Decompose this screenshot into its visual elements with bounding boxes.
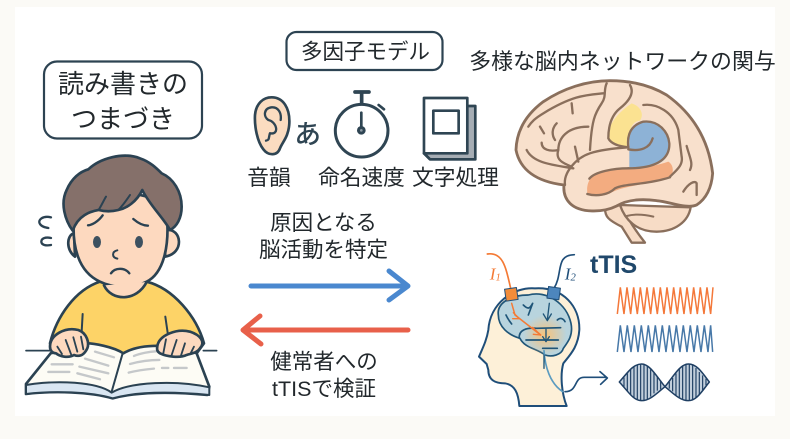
- label: identify causes: [259, 211, 388, 262]
- chart: orange carrier wave: [617, 287, 713, 314]
- label: verify with tTIS: 健常者への: [270, 350, 378, 374]
- current paths: [512, 303, 541, 335]
- label: verify with tTIS: tTISで検証: [272, 377, 376, 401]
- blue region: [629, 122, 669, 168]
- chart: blue carrier wave: [617, 325, 713, 352]
- brows: [88, 215, 148, 226]
- yellow region: [608, 103, 642, 147]
- cerebrum: [516, 81, 713, 211]
- right hand: [157, 331, 202, 357]
- face: [74, 194, 167, 287]
- label: visual processing: 文字処理: [412, 165, 499, 190]
- sulci: [527, 83, 697, 195]
- wire I2: [554, 255, 574, 288]
- orange region: [587, 162, 673, 196]
- brain stem: [544, 351, 563, 392]
- activation glow: [523, 315, 567, 355]
- heading box: multifactor model: 多因子モデル: [301, 40, 430, 64]
- wire I1: [487, 254, 511, 288]
- nose and mouth: [113, 250, 117, 259]
- left hand: [50, 329, 88, 357]
- brain: [498, 294, 572, 356]
- label I1: I: [490, 264, 496, 283]
- output arrow: [565, 372, 607, 392]
- heading box: reading difficulty: [44, 62, 202, 138]
- head silhouette: [479, 288, 579, 406]
- icon: ear with kana: [255, 97, 321, 154]
- icon: stopwatch: [335, 92, 388, 157]
- cerebellum: [620, 205, 691, 232]
- illustration: boy reading a book: [26, 156, 217, 398]
- label: naming speed: 命名速度: [318, 165, 405, 190]
- label I2: 2: [571, 272, 577, 283]
- sweat marks: [39, 217, 51, 245]
- heading box: reading difficulty: 読み書きの: [58, 69, 188, 99]
- illustration: head with tTIS electrodes: [479, 254, 607, 406]
- heading box: multifactor model: [286, 32, 442, 70]
- eyes: [93, 236, 101, 248]
- ears: [68, 233, 75, 257]
- icon: ear with kana: あ: [294, 120, 321, 150]
- label: phonology: 音韻: [247, 165, 291, 190]
- heading: tTIS: tTIS: [590, 251, 637, 279]
- sulci: [506, 303, 565, 348]
- book text lines: [48, 351, 187, 379]
- icon: text card: [424, 98, 475, 159]
- label: identify causes: 原因となる: [270, 211, 377, 235]
- heading box: reading difficulty: つまづき: [71, 104, 175, 134]
- illustration: brain with coloured regions: [516, 81, 713, 243]
- arrow: red left: [243, 316, 408, 344]
- label I1: 1: [496, 272, 501, 283]
- brain stem: [605, 205, 645, 243]
- heading: brain networks: 多様な脳内ネットワークの関与: [469, 49, 776, 74]
- neck: [104, 282, 147, 297]
- open book: [26, 343, 209, 398]
- shirt: [50, 282, 204, 353]
- electrode I2: [547, 287, 560, 300]
- desk line: [26, 348, 217, 353]
- label: verify with tTIS: [270, 350, 378, 401]
- hair: [64, 156, 182, 231]
- label: identify causes: 脳活動を特定: [259, 238, 388, 262]
- arrow: blue right: [251, 271, 408, 300]
- chart: interference envelope: [619, 364, 709, 401]
- label I2: I: [565, 264, 571, 283]
- electrode I1: [505, 288, 518, 301]
